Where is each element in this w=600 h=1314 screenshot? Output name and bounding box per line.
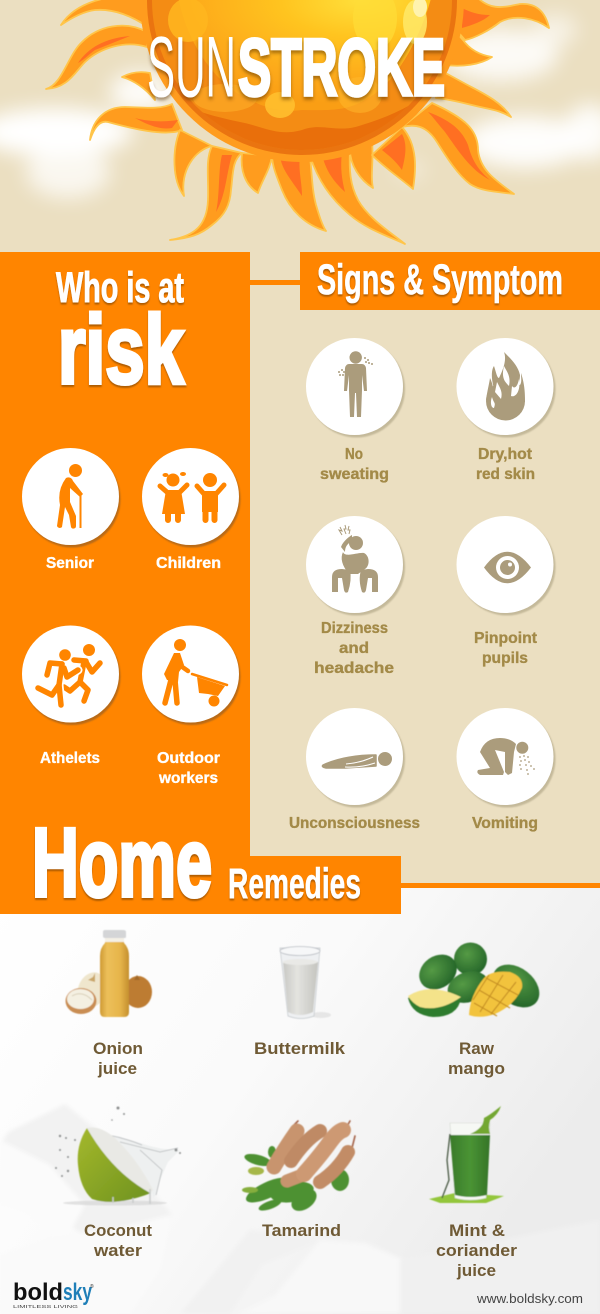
icon: worker with wheelbarrow [164,639,227,706]
item: Vomiting: Vomiting [472,815,538,832]
banner: Home Remedies: Home [32,808,212,917]
item: Vomiting [456,708,556,832]
image: coconut splash [55,1106,181,1206]
remedy: onion juice: Onion [93,1040,143,1058]
item: Unconsciousness [289,708,420,832]
logo: boldsky: LIMITLESS LIVING [13,1304,79,1309]
item: Pinpoint pupils [456,516,556,667]
bottom background [0,888,600,1314]
remedy: raw mango [408,942,548,1078]
heading: Who is at risk: Who is at [56,264,184,312]
remedy: mint and coriander juice: coriander [436,1242,518,1260]
item: Outdoor workers: workers [158,770,218,787]
item: Dizziness and headache: Dizziness [321,620,388,637]
remedy: onion juice [66,930,152,1078]
remedy: coconut water [55,1106,181,1260]
heading: Who is at risk: risk [58,295,185,404]
remedy: mint and coriander juice: juice [456,1262,496,1280]
image: bottle and onions [66,930,152,1017]
sun rays [46,0,549,244]
item: Children: Children [156,555,221,572]
ray inner accents [78,8,490,212]
image: glass of buttermilk [280,946,331,1018]
remedy: mint and coriander juice [429,1106,518,1280]
website url: www.boldsky.com [476,1291,583,1306]
panel: signs and symptoms heading bar [250,252,600,310]
icon: two runners [38,644,100,705]
title: SUNSTROKE [147,20,445,116]
remedy: tamarind [242,1121,355,1240]
item: Outdoor workers [142,626,240,787]
item: Pinpoint pupils: pupils [482,650,528,667]
remedy: raw mango: Raw [459,1040,494,1058]
item: Senior: Senior [46,555,94,572]
icon: two children [160,472,224,520]
item: Dry, hot red skin: Dry,hot [478,446,532,463]
item: Dry, hot red skin: red skin [476,466,535,483]
item: Unconsciousness: Unconsciousness [289,815,420,832]
icon: eye [484,552,531,583]
sun disc [140,0,464,170]
item: Dizziness and headache [306,516,405,677]
divider: orange rule beside home remedies [401,883,600,888]
remedy: coconut water: water [93,1242,143,1260]
remedy: tamarind: Tamarind [262,1222,341,1240]
remedy: coconut water: Coconut [84,1222,153,1240]
item: Children [142,448,240,572]
icon: person vomiting [477,738,535,775]
icon: person lying down [322,752,392,768]
title: SUNSTROKE: SUN [147,20,236,116]
image: green mangoes [408,942,548,1017]
page background: beige [0,0,600,914]
icon: flame [486,352,525,420]
item: Pinpoint pupils: Pinpoint [474,630,537,647]
background clouds [0,14,600,198]
sun illustration [46,0,549,244]
item: Dizziness and headache: headache [314,660,394,677]
icon: person with sweat [338,351,373,417]
remedy: buttermilk: Buttermilk [254,1040,346,1058]
item: No sweating: sweating [320,466,389,483]
item: Senior [22,448,120,572]
remedy: buttermilk [254,946,346,1058]
item: Dry, hot red skin [456,338,556,483]
item: No sweating [306,338,405,483]
image: tamarind pods and leaves [242,1121,355,1215]
banner: Home Remedies: Remedies [228,860,361,908]
logo: boldsky: bold [13,1279,63,1306]
icon: senior with cane [57,464,83,529]
item: Outdoor workers: Outdoor [157,750,220,767]
item: Dizziness and headache: and [339,640,369,657]
remedy: onion juice: juice [97,1060,137,1078]
image: green juice glass [429,1106,504,1203]
icon: person holding head [332,525,378,593]
panel: who is at risk [0,252,250,856]
item: No sweating: No [345,446,363,463]
remedy: raw mango: mango [448,1060,505,1078]
heading: Who is at risk [56,264,185,404]
logo: boldsky: sky [63,1279,92,1306]
logo: boldsky: ® [90,1283,94,1290]
title: SUNSTROKE: STROKE [238,23,445,113]
banner: Home Remedies [0,800,401,917]
remedy: mint and coriander juice: Mint & [449,1222,505,1240]
item: Athelets [22,626,120,767]
item: Athelets: Athelets [40,750,100,767]
logo: boldsky [13,1279,94,1309]
